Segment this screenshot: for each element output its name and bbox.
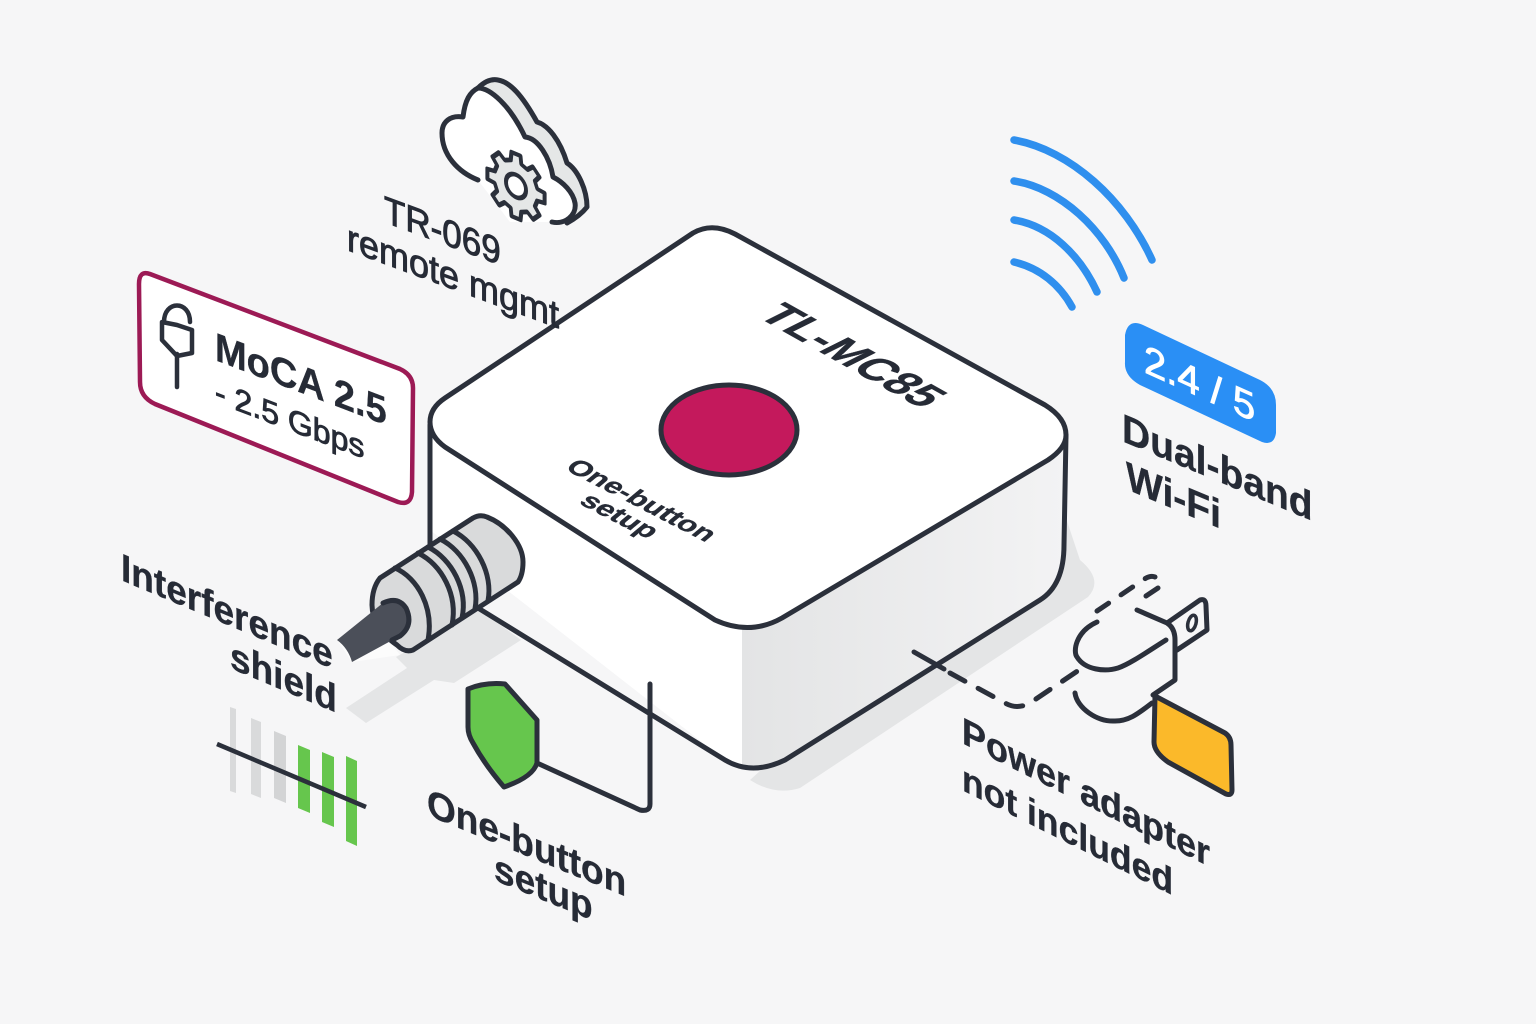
- device button caption: One-button: [560, 454, 724, 546]
- adapter yellow tag: [1154, 696, 1232, 794]
- device shadow: [346, 500, 1094, 791]
- label: Dual-band Wi-Fi: Dual-band: [1122, 405, 1313, 530]
- power cord dashes: [914, 652, 944, 669]
- label: Interference shield: Interference: [121, 546, 333, 678]
- label: Interference shield: shield: [230, 634, 337, 722]
- icon: green shield: [468, 684, 650, 810]
- device button caption: setup: [574, 488, 666, 543]
- badge: 2.4 / 5: [1125, 323, 1276, 443]
- label: Dual-band Wi-Fi: Wi-Fi: [1126, 453, 1221, 538]
- label: One-button setup: setup: [494, 846, 593, 929]
- MoCA heading: MoCA 2.5: [215, 324, 387, 434]
- device side faces: [430, 425, 1066, 770]
- button: [661, 385, 797, 475]
- icon: coax plug: [162, 306, 192, 387]
- icon: wifi arcs: [1014, 140, 1152, 307]
- connector rings: [395, 531, 489, 640]
- icon: power plug: [914, 576, 1232, 794]
- label: Power adapter not included: not included: [962, 757, 1173, 904]
- label: TR-069 remote mgmt: remote mgmt: [347, 217, 559, 338]
- connector barrel: [372, 516, 523, 651]
- MoCA speed: - 2.5 Gbps: [215, 374, 364, 466]
- coax connector: [337, 516, 523, 662]
- chart: interference bars: [217, 707, 366, 846]
- label: TR-069 remote mgmt: TR-069: [384, 188, 501, 273]
- device top face: [430, 228, 1066, 628]
- icon: cloud with gear: [442, 80, 587, 230]
- icon: gear: [487, 142, 545, 230]
- label: Power adapter not included: Power adapter: [962, 710, 1210, 876]
- label: One-button setup: One-button: [427, 781, 626, 906]
- badge: 2.4 / 5: 2.4 / 5: [1144, 336, 1255, 431]
- cable: [337, 600, 409, 662]
- model name: TL-MC85: [747, 297, 959, 413]
- panel: MoCA 2.5: [139, 273, 413, 503]
- device: TL-MC85 box: [430, 228, 1066, 770]
